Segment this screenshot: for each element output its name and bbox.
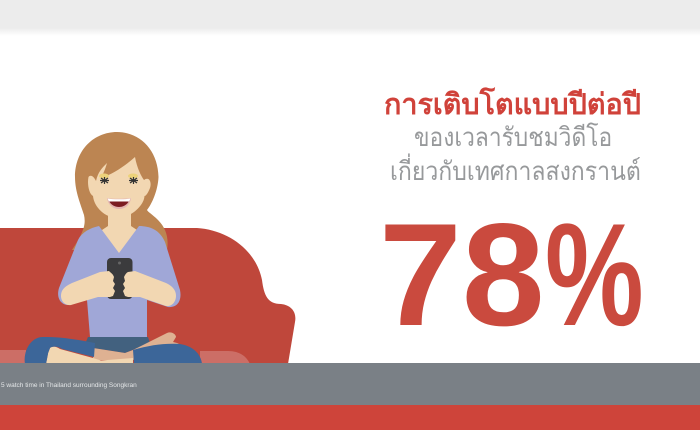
- big stat: %: [545, 193, 644, 356]
- subheading line 2: เกี่ยวกับเทศกาลสงกรานต์: [390, 156, 641, 186]
- eyes: [99, 174, 138, 184]
- legs and feet: [25, 332, 202, 364]
- big stat: [379, 193, 644, 356]
- heading: การเติบโตแบบปีต่อปี: [384, 89, 641, 121]
- arms and hands: [61, 271, 176, 306]
- hair: [72, 132, 168, 250]
- illustration: woman on sofa: [0, 132, 296, 363]
- bottom band: [0, 405, 700, 430]
- big stat: 78: [379, 193, 545, 356]
- footer bar: [0, 363, 700, 405]
- mouth: [107, 198, 131, 209]
- face: [88, 157, 151, 218]
- subheading line 1: ของเวลารับชมวิดีโอ: [414, 122, 612, 152]
- top band: [0, 0, 700, 36]
- phone: [107, 258, 132, 299]
- neck and chest: [99, 205, 140, 262]
- footnote: 5 watch time in Thailand surrounding Songkran: [1, 382, 137, 389]
- sofa: [0, 228, 295, 364]
- jeans waist: [85, 337, 150, 353]
- shirt: [58, 226, 180, 337]
